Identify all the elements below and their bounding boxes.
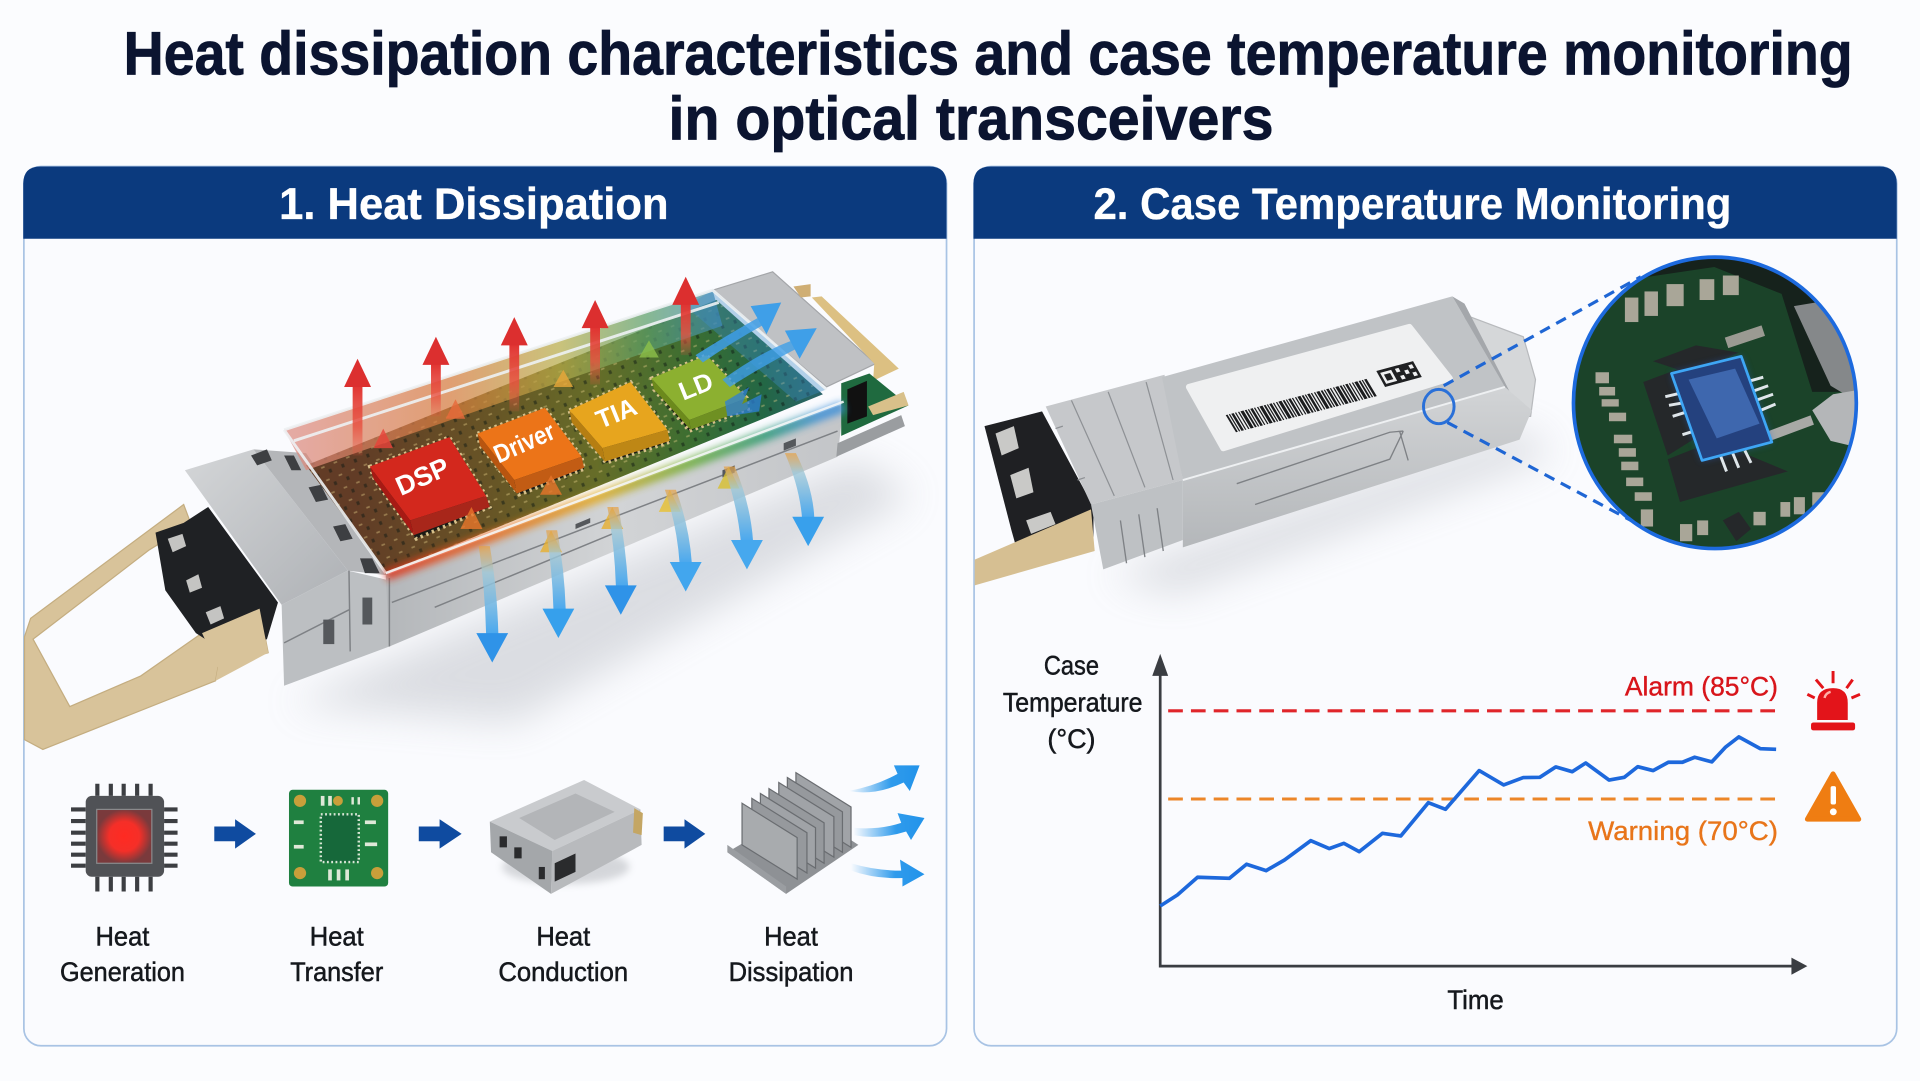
label: heat transfer: Heat	[310, 921, 364, 951]
arrows: heat toward rear	[696, 302, 817, 416]
flow: heat path	[60, 765, 924, 987]
label: heat generation: Generation	[60, 957, 185, 987]
panel header	[973, 167, 1897, 239]
side wall details	[323, 438, 796, 644]
connector latches	[996, 426, 1056, 534]
y axis label	[1003, 651, 1142, 754]
axes	[1152, 654, 1807, 975]
chip glow	[1671, 356, 1772, 460]
chip: LD	[651, 355, 748, 431]
ground shadow	[1108, 429, 1555, 594]
panel header	[23, 167, 947, 239]
label: heat dissipation	[729, 921, 853, 987]
chip: LD: LD	[675, 367, 717, 406]
label: heat generation: Heat	[96, 921, 150, 951]
title: in optical transceivers	[669, 85, 1273, 153]
label: heat conduction: Conduction	[498, 957, 628, 987]
chip: DSP	[370, 437, 490, 539]
icon: heat sink	[727, 773, 858, 894]
rear corner	[1452, 296, 1510, 392]
components	[1596, 276, 1824, 541]
metal rods	[1727, 331, 1763, 343]
chip: TIA: TIA	[592, 393, 641, 435]
glass back wall	[284, 290, 722, 470]
label: heat conduction: Heat	[536, 921, 591, 951]
alarm label: Alarm (85°C)	[1625, 672, 1778, 702]
panel frame	[24, 167, 947, 1046]
illustration: transceiver with heat flow	[24, 272, 912, 749]
arrows: heat rising	[344, 277, 699, 456]
monitored chip	[1671, 356, 1772, 460]
magnified view	[1567, 245, 1861, 557]
x axis label: Time	[1447, 985, 1504, 1015]
arrows: heat sinking downward	[476, 453, 824, 662]
chart: case temperature over time	[1003, 651, 1860, 1015]
chip: TIA	[569, 382, 670, 463]
side wall seams	[284, 431, 838, 651]
connector latches	[168, 534, 224, 625]
front block top	[185, 449, 348, 605]
chip: Driver	[478, 408, 584, 495]
edge highlight	[1183, 387, 1505, 480]
arrow: conduction to dissipation	[664, 819, 705, 849]
pins	[1665, 377, 1776, 471]
dark corner	[1648, 259, 1841, 392]
glass rails	[284, 290, 827, 573]
icon: heat generation chip	[71, 784, 178, 891]
inside pcb	[306, 300, 823, 573]
front lower face	[282, 571, 389, 686]
rear glass section	[686, 290, 827, 402]
arrows: heat through internal paths	[373, 340, 740, 552]
latch detail	[251, 449, 380, 573]
icon: warning triangle	[1807, 774, 1859, 819]
label: heat conduction	[498, 921, 628, 987]
illustration: sealed transceiver	[975, 245, 1861, 594]
fibre connector	[984, 411, 1093, 569]
ground shadow	[288, 459, 912, 722]
arrow: generation to transfer	[214, 819, 256, 849]
chip: Driver: Driver	[490, 418, 559, 469]
rear connector edge	[812, 296, 899, 381]
side wall	[386, 404, 844, 647]
label: heat generation	[60, 921, 185, 987]
label: heat transfer: Transfer	[290, 957, 383, 987]
barcode	[1231, 387, 1372, 424]
panel header: 2. Case Temperature Monitoring	[1093, 180, 1731, 229]
label: heat dissipation: Heat	[764, 921, 818, 951]
arrow: transfer to conduction	[419, 819, 462, 849]
lens border	[1573, 257, 1856, 549]
front latch section	[253, 449, 389, 576]
panel header: 1. Heat Dissipation	[279, 180, 669, 229]
right handle arm	[202, 609, 268, 681]
y axis label: (°C)	[1047, 724, 1095, 754]
title	[124, 20, 1853, 153]
rear silver plate	[713, 272, 876, 387]
fibre connector	[156, 507, 278, 649]
icon: heat transfer pcb	[289, 790, 388, 887]
alarm threshold	[1168, 710, 1779, 712]
label: heat dissipation: Dissipation	[729, 957, 853, 987]
temperature line	[1160, 737, 1776, 906]
label: heat transfer	[290, 921, 383, 987]
black packages	[1643, 345, 1788, 541]
product label	[1189, 327, 1450, 448]
panel: case temperature monitoring	[973, 167, 1897, 1046]
rear pcb	[841, 373, 909, 436]
warning threshold	[1168, 798, 1779, 800]
body top	[1162, 296, 1505, 480]
panel frame	[974, 167, 1897, 1046]
icon: conduction module	[490, 780, 643, 894]
dashed callout lines	[1444, 277, 1647, 529]
hot front rail	[386, 407, 844, 576]
sensor marker	[1423, 389, 1454, 424]
warning label: Warning (70°C)	[1588, 816, 1778, 846]
arrows: heat leaving sink	[849, 765, 924, 887]
side seams	[1120, 431, 1408, 563]
chip: DSP: DSP	[391, 452, 454, 502]
y axis label: Temperature	[1003, 687, 1142, 717]
pull tab	[975, 509, 1095, 585]
body side	[1183, 387, 1532, 547]
rear connector	[1464, 315, 1536, 416]
pull handle	[24, 504, 268, 749]
qr code	[1376, 361, 1422, 387]
cage details	[1056, 382, 1173, 496]
body front side	[1091, 480, 1183, 569]
y axis label: Case	[1044, 651, 1099, 681]
icon: alarm siren	[1807, 671, 1860, 730]
panel: heat dissipation	[23, 167, 947, 1046]
front cage top	[1046, 375, 1183, 504]
